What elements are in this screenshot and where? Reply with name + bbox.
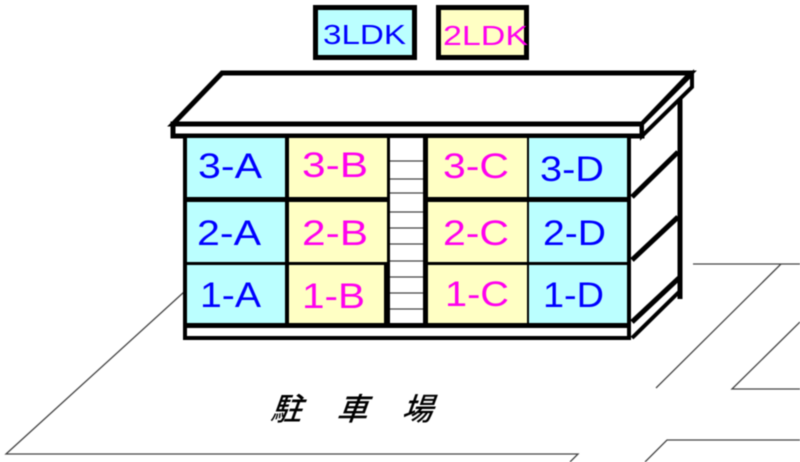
unit 3-A: 3-A <box>198 147 263 186</box>
unit 3-D <box>529 138 627 197</box>
parking label <box>268 392 442 427</box>
unit 2-B <box>289 202 387 262</box>
unit 3-B <box>289 138 387 197</box>
staircase <box>390 138 423 323</box>
parking label: 車 <box>334 392 377 427</box>
building side wall <box>631 95 681 338</box>
unit 3-C: 3-C <box>443 147 509 186</box>
unit 2-A: 2-A <box>197 214 262 253</box>
unit 1-C: 1-C <box>445 275 509 314</box>
building front wall frame <box>183 136 631 340</box>
unit 1-A: 1-A <box>200 276 262 315</box>
legend: 2LDK <box>438 8 528 58</box>
roof <box>173 73 692 136</box>
unit 2-D: 2-D <box>543 214 606 253</box>
legend: 3LDK <box>316 8 414 58</box>
unit 3-A <box>187 138 285 197</box>
unit 3-C <box>428 138 527 197</box>
legend: 3LDK: 3LDK <box>323 19 406 50</box>
unit 1-B: 1-B <box>302 277 365 316</box>
unit 2-C <box>428 202 527 262</box>
parking label: 場 <box>399 392 442 427</box>
unit 2-D <box>529 202 627 262</box>
base band <box>187 328 627 336</box>
parking label: 駐 <box>268 392 311 427</box>
unit 1-B <box>289 265 384 323</box>
unit 2-B: 2-B <box>302 214 368 253</box>
unit 3-D: 3-D <box>540 150 604 189</box>
unit 1-A <box>187 265 285 323</box>
unit 1-D <box>529 265 627 323</box>
legend: 2LDK: 2LDK <box>443 20 528 51</box>
unit 2-C: 2-C <box>443 214 509 253</box>
unit 3-B: 3-B <box>302 146 368 185</box>
unit 1-D: 1-D <box>543 276 604 315</box>
unit 2-A <box>187 202 285 262</box>
unit 1-C <box>428 265 527 323</box>
parking lot outline <box>6 264 800 462</box>
